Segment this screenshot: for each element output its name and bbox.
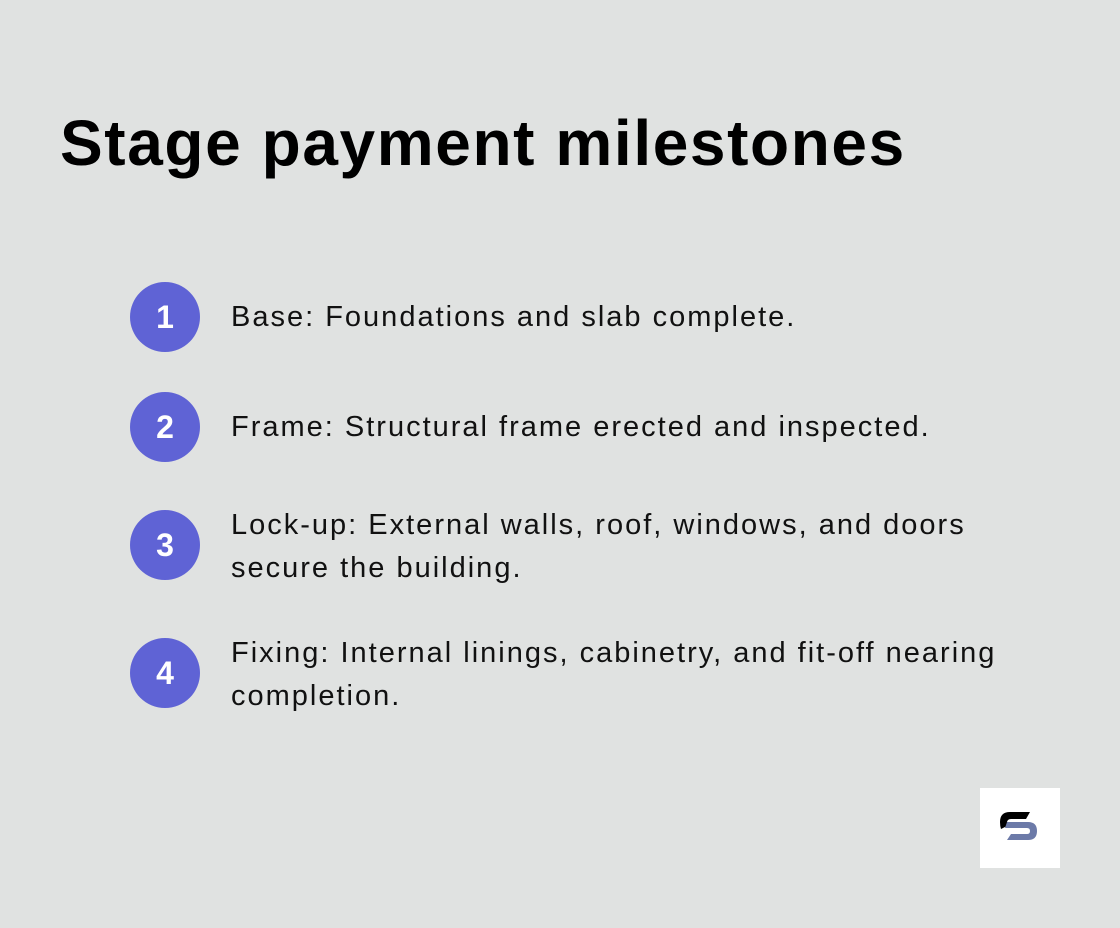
step 3 <box>130 509 966 584</box>
step 1 <box>130 282 796 352</box>
text: 2 <box>156 409 174 445</box>
step 4 <box>130 637 996 712</box>
step 2 <box>130 392 931 462</box>
text: Lock-up: External walls, roof, windows, and doors <box>231 509 966 541</box>
text: secure the building. <box>231 552 522 584</box>
title: Stage payment milestones <box>60 107 906 179</box>
text: 1 <box>156 299 174 335</box>
text: completion. <box>231 680 401 712</box>
text: 3 <box>156 527 174 563</box>
text: Frame: Structural frame erected and inspected. <box>231 411 931 443</box>
logo <box>980 788 1060 868</box>
text: Base: Foundations and slab complete. <box>231 301 796 333</box>
text: Fixing: Internal linings, cabinetry, and fit-off nearing <box>231 637 996 669</box>
text: 4 <box>156 655 174 691</box>
